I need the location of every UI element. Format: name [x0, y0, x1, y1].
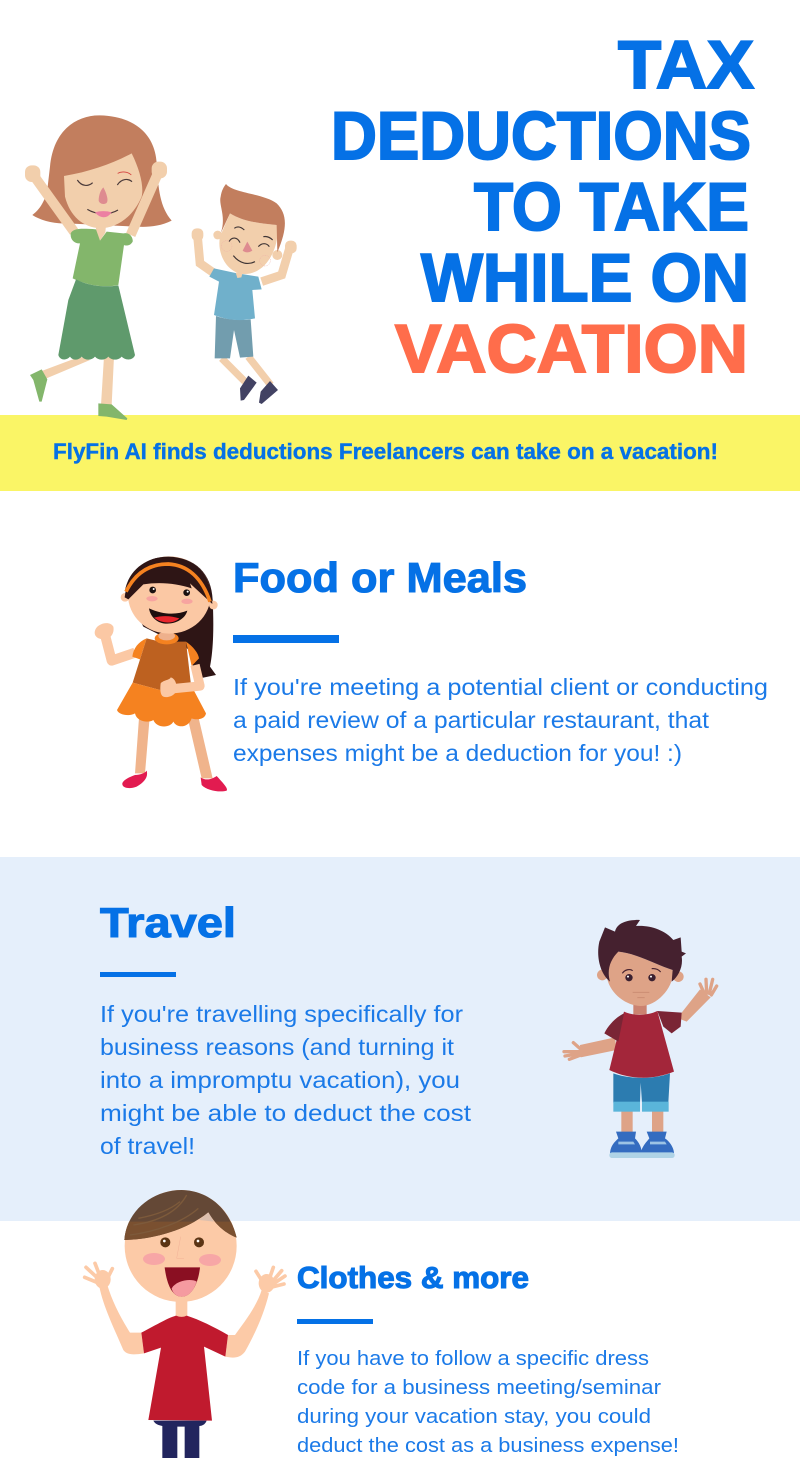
illustration: boy jumping [192, 184, 297, 404]
banner: yellow strip with tagline: FlyFin AI finds deductions Freelancers can take on a vacation! [53, 439, 718, 464]
illustration: girl in orange dress [95, 556, 227, 791]
rule [297, 1319, 373, 1324]
text block: clothes: If you have to follow a specific dress [297, 1348, 649, 1370]
title [331, 27, 754, 387]
panel: travel [0, 857, 800, 1221]
title: WHILE ON [421, 240, 749, 316]
text block: clothes [297, 1348, 679, 1457]
text block: food: expenses might be a deduction for you! :) [233, 740, 682, 766]
text block: travel: might be able to deduct the cost [100, 1100, 472, 1126]
panel: clothes and more [85, 1190, 679, 1458]
illustration: boy with raised arms [85, 1190, 285, 1458]
title: TAX [618, 27, 754, 103]
heading: travel: Travel [100, 899, 236, 946]
illustration: woman jumping [25, 115, 172, 420]
text block: food [233, 674, 768, 766]
text block: travel: If you're travelling specifically for [100, 1001, 463, 1027]
text block: travel [100, 1001, 472, 1159]
text block: clothes: code for a business meeting/seminar [297, 1377, 661, 1399]
rule [233, 635, 339, 643]
text block: food: a paid review of a particular restaurant, that [233, 707, 710, 733]
illustration: boy waving [564, 920, 717, 1158]
text block: travel: business reasons (and turning it [100, 1034, 455, 1060]
text block: travel: into a impromptu vacation), you [100, 1067, 460, 1093]
title: DEDUCTIONS [331, 98, 751, 174]
banner: yellow strip with tagline [0, 415, 800, 491]
rule [100, 972, 176, 977]
text block: clothes: during your vacation stay, you could [297, 1406, 651, 1428]
text block: clothes: deduct the cost as a business expense! [297, 1435, 679, 1457]
heading: clothes and more: Clothes & more [297, 1260, 529, 1295]
text block: travel: of travel! [100, 1133, 195, 1159]
title: TO TAKE [474, 169, 749, 245]
text block: food: If you're meeting a potential client or conducting [233, 674, 768, 700]
panel: food or meals [95, 554, 768, 791]
title: VACATION [395, 311, 748, 387]
heading: food or meals: Food or Meals [233, 554, 527, 601]
